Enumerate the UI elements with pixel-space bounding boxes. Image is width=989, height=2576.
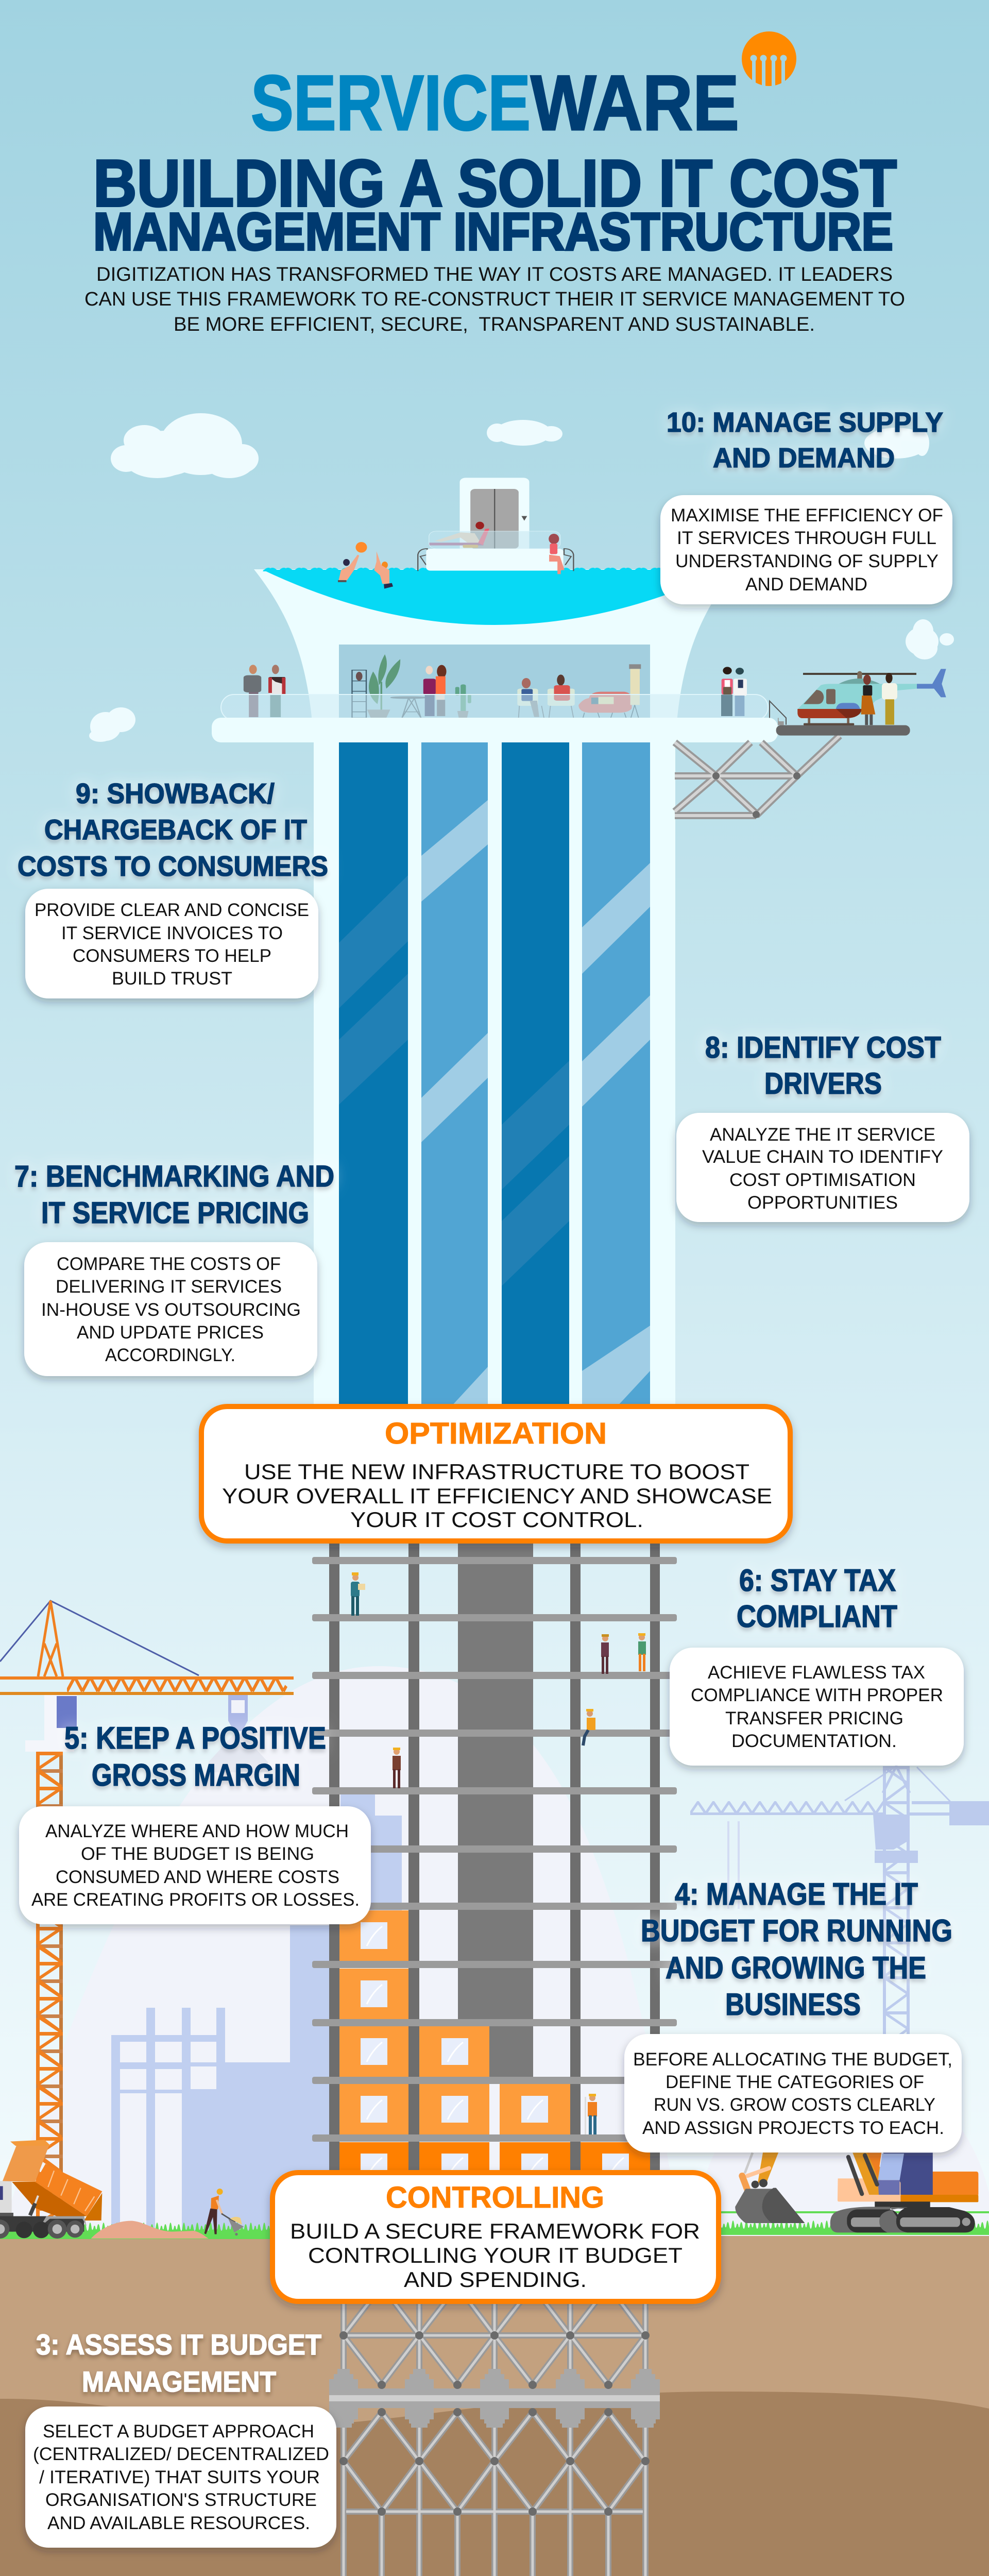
clouds — [89, 413, 954, 742]
core — [458, 1540, 533, 2081]
card: step 5 — [19, 1806, 371, 1924]
heading: step 6: 6: STAY TAX — [739, 1563, 896, 1598]
heading: step 8 — [705, 1031, 941, 1100]
heading: step 4: BUDGET FOR RUNNING — [641, 1913, 952, 1948]
building lattice — [111, 1794, 402, 2239]
step 9 — [18, 777, 328, 998]
excavator body — [838, 2153, 978, 2209]
card: step 6: COMPLIANCE WITH PROPER — [691, 1685, 943, 1705]
background city: pale hills, buildings and cranes — [0, 1601, 989, 2414]
heading: step 5 — [64, 1721, 326, 1792]
construction frame — [312, 1540, 677, 2180]
helipad deck — [776, 725, 910, 736]
heading: step 9 — [18, 777, 328, 882]
steel columns — [329, 1540, 660, 2174]
card: step 9: IT SERVICE INVOICES TO — [61, 923, 283, 943]
heading: step 9: COSTS TO CONSUMERS — [18, 850, 328, 882]
card: step 8: OPPORTUNITIES — [747, 1193, 898, 1213]
floor lamp — [629, 664, 641, 669]
couple beside helicopter — [861, 673, 897, 725]
ground: second soil layer — [0, 2392, 989, 2576]
card: step 3: (CENTRALIZED/ DECENTRALIZED — [33, 2444, 329, 2464]
guests outside left — [244, 665, 285, 717]
step 8 — [676, 1031, 969, 1222]
card: step 8: COST OPTIMISATION — [729, 1170, 916, 1190]
card: step 8: ANALYZE THE IT SERVICE — [710, 1125, 935, 1145]
helicopter — [797, 671, 917, 725]
card: step 3: ORGANISATION'S STRUCTURE — [45, 2490, 317, 2510]
heading: step 10: AND DEMAND — [713, 443, 895, 473]
two women — [423, 665, 447, 716]
step 10 — [660, 407, 952, 604]
card: step 5: ANALYZE WHERE AND HOW MUCH — [45, 1821, 349, 1841]
tower: white structure — [254, 566, 735, 1407]
table — [391, 697, 427, 718]
card: step 10: MAXIMISE THE EFFICIENCY OF — [671, 505, 943, 526]
heading: step 6: COMPLIANT — [737, 1599, 897, 1634]
card: step 7 — [24, 1242, 317, 1376]
card: step 4: DEFINE THE CATEGORIES OF — [666, 2072, 924, 2092]
arm and bucket — [735, 2152, 805, 2223]
card: step 4: RUN VS. GROW COSTS CLEARLY — [654, 2095, 935, 2115]
floor beams — [312, 1557, 677, 2142]
card: step 9: CONSUMERS TO HELP — [73, 946, 271, 966]
heading: step 7: IT SERVICE PRICING — [41, 1196, 309, 1230]
card: step 4: AND ASSIGN PROJECTS TO EACH. — [642, 2118, 944, 2138]
intro text: CAN USE THIS FRAMEWORK TO RE-CONSTRUCT THEIR IT SERVICE MANAGEMENT TO — [84, 289, 905, 310]
stage box: optimization — [201, 1406, 790, 1541]
stage box: optimization: YOUR IT COST CONTROL. — [350, 1507, 643, 1532]
card: step 4: BEFORE ALLOCATING THE BUDGET, — [633, 2049, 952, 2070]
card: step 7: COMPARE THE COSTS OF — [57, 1254, 281, 1274]
intro text: BE MORE EFFICIENT, SECURE, TRANSPARENT AND SUSTAINABLE. — [174, 314, 815, 335]
heading: step 3 — [36, 2328, 321, 2398]
heading: step 7 — [14, 1160, 334, 1230]
tail of helicopter — [917, 669, 946, 697]
heading: step 7: 7: BENCHMARKING AND — [14, 1160, 334, 1193]
card: step 8: VALUE CHAIN TO IDENTIFY — [702, 1147, 943, 1167]
card: step 9: BUILD TRUST — [112, 969, 232, 989]
heading: step 10: 10: MANAGE SUPPLY — [667, 407, 943, 438]
card: step 7: AND UPDATE PRICES — [77, 1323, 264, 1343]
rooftop elevator and swimmers — [338, 478, 573, 589]
swimmers — [338, 551, 393, 589]
orange wall panels — [339, 1910, 570, 2134]
title: BUILDING A SOLID IT COST — [93, 146, 897, 221]
woman on the pool edge — [549, 534, 565, 574]
card: step 9 — [25, 889, 318, 998]
step 4 — [624, 1877, 962, 2153]
card: step 6: DOCUMENTATION. — [731, 1731, 897, 1751]
card: step 5: OF THE BUDGET IS BEING — [81, 1844, 314, 1864]
card: step 10: UNDERSTANDING OF SUPPLY — [675, 551, 939, 571]
card: step 6: ACHIEVE FLAWLESS TAX — [708, 1663, 925, 1683]
heading: step 4 — [641, 1877, 952, 2022]
heading: step 8: DRIVERS — [764, 1067, 882, 1100]
heading: step 9: 9: SHOWBACK/ — [76, 777, 275, 809]
excavator — [735, 2152, 978, 2232]
card: step 10: AND DEMAND — [745, 574, 867, 595]
heading: step 4: AND GROWING THE — [666, 1951, 926, 1985]
dump truck — [0, 2140, 102, 2239]
penthouse window — [339, 645, 650, 718]
card: step 10 — [660, 495, 952, 604]
card: step 4 — [624, 2034, 962, 2153]
stage box: controlling: CONTROLLING — [386, 2181, 604, 2214]
stair rail — [770, 701, 786, 725]
intro text — [84, 264, 905, 335]
heading: step 5: GROSS MARGIN — [92, 1758, 300, 1792]
heading: step 4: BUSINESS — [725, 1987, 861, 2022]
card: step 7: IN-HOUSE VS OUTSOURCING — [41, 1300, 301, 1320]
two women on platform — [721, 667, 747, 716]
stage box: controlling: BUILD A SECURE FRAMEWORK FOR — [290, 2219, 700, 2243]
construction workers — [351, 1572, 646, 2134]
shelf — [352, 670, 366, 718]
penthouse lounge with people, plant and furniture — [244, 654, 641, 718]
logo icon: orange circle — [742, 31, 796, 87]
card: step 5: CONSUMED AND WHERE COSTS — [56, 1867, 339, 1887]
heading: step 3: MANAGEMENT — [82, 2365, 276, 2398]
step 3 — [25, 2328, 336, 2548]
step 5 — [19, 1721, 371, 1924]
card: step 10: IT SERVICES THROUGH FULL — [677, 528, 936, 548]
heading: step 6 — [737, 1563, 897, 1634]
card: step 9: PROVIDE CLEAR AND CONCISE — [35, 900, 309, 920]
logo wordmark: SERVICE — [251, 59, 531, 147]
stage box: optimization: YOUR OVERALL IT EFFICIENCY AND SHOWCASE — [222, 1484, 772, 1508]
step 6 — [670, 1563, 964, 1766]
card: step 3 — [25, 2406, 336, 2548]
card: step 3: SELECT A BUDGET APPROACH — [43, 2421, 314, 2442]
viewing platform with glass railing — [212, 694, 778, 742]
card: step 6 — [670, 1648, 964, 1766]
heading: step 10 — [667, 407, 943, 473]
ground: topsoil — [0, 2236, 989, 2576]
title — [93, 146, 897, 261]
heading: step 9: CHARGEBACK OF IT — [44, 814, 307, 845]
helipad steel truss — [675, 736, 840, 818]
stage box: optimization: USE THE NEW INFRASTRUCTURE TO BOOST — [244, 1460, 749, 1484]
step 7 — [14, 1160, 334, 1376]
card: step 7: DELIVERING IT SERVICES — [56, 1277, 282, 1297]
stage box: controlling: CONTROLLING YOUR IT BUDGET — [308, 2243, 683, 2267]
pale crane right — [690, 1766, 989, 2034]
logo wordmark: WARE — [531, 59, 739, 147]
sofa — [578, 692, 632, 713]
grass — [0, 2211, 989, 2239]
helipad and helicopter — [721, 667, 946, 736]
heading: step 8: 8: IDENTIFY COST — [705, 1031, 941, 1064]
card: step 7: ACCORDINGLY. — [105, 1345, 235, 1365]
glass windows — [339, 742, 650, 1407]
heading: step 3: 3: ASSESS IT BUDGET — [36, 2328, 321, 2361]
card: step 5: ARE CREATING PROFITS OR LOSSES. — [31, 1890, 360, 1910]
underground truss foundation — [303, 2286, 686, 2576]
heading: step 5: 5: KEEP A POSITIVE — [64, 1721, 326, 1755]
orange crane left — [0, 1601, 294, 2221]
rooftop pool water — [263, 570, 726, 625]
stage box: optimization: OPTIMIZATION — [385, 1417, 607, 1450]
stage box: controlling: AND SPENDING. — [404, 2267, 587, 2292]
windows — [361, 1922, 629, 2180]
flange — [329, 2388, 660, 2408]
heading: step 4: 4: MANAGE THE IT — [675, 1877, 918, 1911]
card: step 8 — [676, 1113, 969, 1222]
cactus — [455, 684, 471, 718]
tracks — [830, 2207, 975, 2232]
logo — [251, 31, 796, 147]
title: MANAGEMENT INFRASTRUCTURE — [93, 202, 893, 261]
card: step 6: TRANSFER PRICING — [725, 1708, 903, 1728]
card: step 3: AND AVAILABLE RESOURCES. — [47, 2513, 310, 2533]
intro text: DIGITIZATION HAS TRANSFORMED THE WAY IT COSTS ARE MANAGED. IT LEADERS — [96, 264, 893, 285]
sand pile and worker with wheelbarrow — [91, 2189, 244, 2239]
potted plant — [367, 654, 400, 718]
stage box: controlling — [272, 2173, 719, 2301]
card: step 3: / ITERATIVE) THAT SUITS YOUR — [39, 2467, 320, 2487]
beach ball — [355, 542, 367, 553]
seated guests — [517, 674, 575, 718]
